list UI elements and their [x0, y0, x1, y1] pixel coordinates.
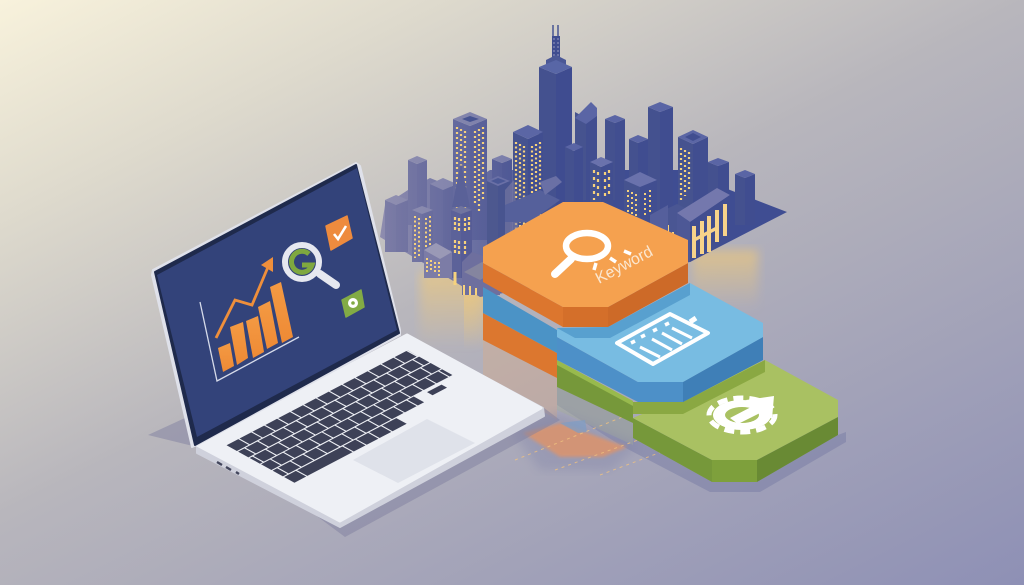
laptop	[148, 163, 560, 537]
green badge	[342, 290, 364, 317]
bar chart	[218, 282, 293, 372]
lit tower O	[624, 172, 657, 240]
reflected city glow	[420, 250, 758, 350]
chart axes	[200, 302, 299, 381]
screen bezel	[152, 163, 400, 447]
lit tower G	[678, 130, 708, 210]
left faded towers	[385, 178, 457, 252]
low foreground buildings	[424, 176, 668, 295]
lit tower A	[453, 112, 487, 240]
big lit building right	[660, 188, 730, 262]
isometric city skyline	[380, 25, 787, 297]
ports	[217, 462, 239, 474]
city ground plane	[380, 170, 787, 297]
trend arrow	[216, 257, 273, 338]
blue step block	[483, 283, 763, 402]
lit spire tower T	[451, 163, 472, 278]
back row towers	[408, 102, 755, 230]
lit tower B	[505, 125, 543, 250]
screen display	[157, 168, 397, 437]
trackpad	[353, 419, 475, 483]
laptop shadow	[148, 405, 560, 537]
lit tower N	[590, 157, 613, 225]
laptop base	[197, 335, 544, 527]
mid towers	[487, 176, 510, 262]
orange step block	[483, 202, 688, 327]
magnifier icon with rays	[555, 233, 631, 274]
gear with upload arrow icon	[709, 396, 775, 432]
green step block	[557, 360, 838, 482]
keyboard	[232, 353, 470, 480]
orange check badge	[326, 216, 352, 250]
lower orange layer	[483, 313, 557, 378]
clipboard checklist icon	[617, 314, 708, 364]
block stack floor shadow and reflections	[483, 340, 846, 492]
main skyscraper with antenna	[539, 25, 583, 235]
magnifier with G	[285, 245, 336, 285]
keyword label: Keyword	[593, 243, 656, 288]
lit tower S	[412, 206, 433, 262]
